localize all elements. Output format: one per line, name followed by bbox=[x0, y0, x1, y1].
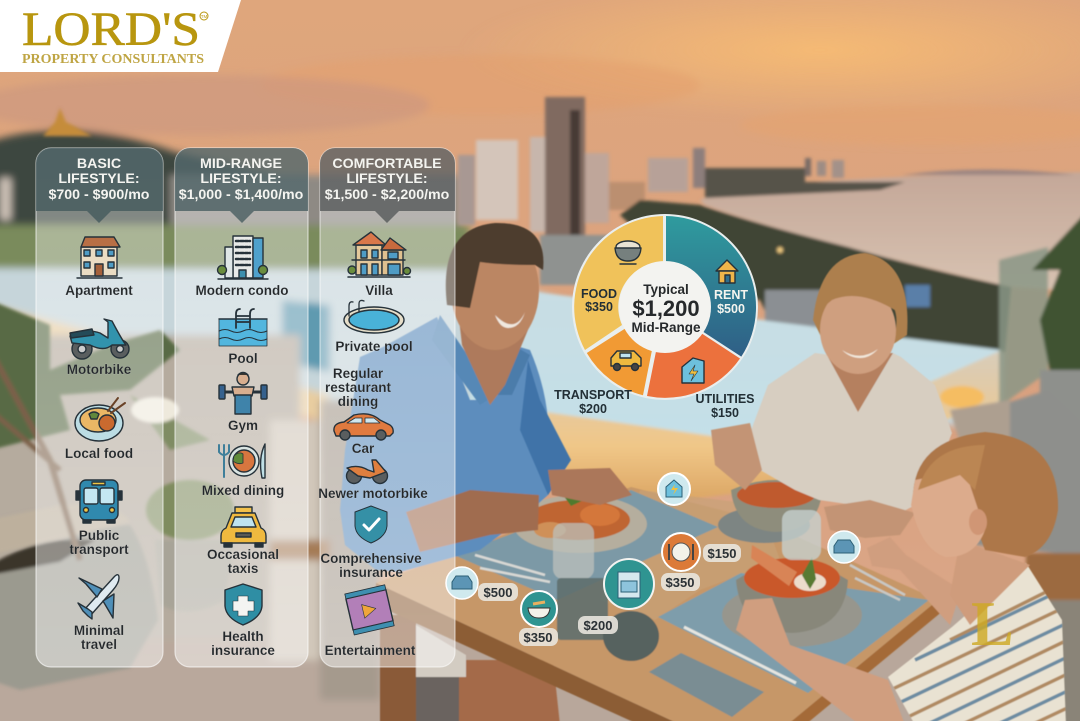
watermark monogram: L bbox=[971, 588, 1014, 659]
segment: food bbox=[574, 216, 663, 350]
label: modern condo: Modern condo bbox=[196, 283, 288, 298]
label: health insurance: Health bbox=[222, 629, 264, 644]
price pill: $150 bbox=[703, 544, 741, 562]
heading: comfortable lifestyle price: COMFORTABLE bbox=[332, 156, 442, 172]
label: food: $350 bbox=[585, 300, 613, 314]
icon: pool bbox=[219, 309, 267, 346]
centre text bbox=[632, 282, 701, 335]
label: gym: Gym bbox=[228, 418, 258, 433]
woman's bowl bbox=[718, 507, 810, 543]
label: rent: $500 bbox=[717, 302, 745, 316]
heading: basic lifestyle price: BASIC bbox=[77, 156, 121, 172]
icon: newer motorbike bbox=[346, 460, 388, 484]
heading: mid-range lifestyle price: MID-RANGE bbox=[200, 156, 282, 172]
label: local food: Local food bbox=[65, 446, 133, 461]
icon: power house bbox=[682, 358, 704, 383]
sea, far coast and city bbox=[700, 172, 1080, 292]
price pill: $500 bbox=[478, 583, 518, 601]
trademark mark: TM bbox=[201, 14, 207, 19]
icon: comprehensive insurance shield bbox=[355, 506, 387, 543]
centre circle bbox=[619, 261, 711, 353]
panel: comfortable lifestyle bbox=[318, 148, 455, 667]
icon: airplane bbox=[78, 575, 119, 619]
icon: house bbox=[716, 260, 738, 283]
price pill: $350 bowl: $350 bbox=[524, 630, 552, 645]
segment: transport bbox=[587, 329, 652, 395]
chair, legs, leg of table bbox=[416, 675, 461, 721]
heading: comfortable lifestyle price: $1,500 - $2,200/mo bbox=[325, 187, 450, 203]
label: occasional taxis: taxis bbox=[228, 561, 258, 576]
placemats bbox=[454, 490, 718, 600]
table cost badges bbox=[446, 473, 860, 646]
logo banner bbox=[0, 0, 241, 72]
label: entertainment: Entertainment bbox=[325, 643, 416, 658]
label: regular restaurant dining: Regular bbox=[333, 366, 384, 381]
heading: mid-range lifestyle price: LIFESTYLE: bbox=[200, 171, 282, 187]
panel header: basic bbox=[36, 148, 163, 223]
icon: entertainment film bbox=[345, 585, 394, 635]
label: car: Car bbox=[352, 441, 375, 456]
label: minimal travel: Minimal bbox=[74, 623, 124, 638]
heading: comfortable lifestyle price: LIFESTYLE: bbox=[346, 171, 428, 187]
badge: utilities icon bbox=[658, 473, 690, 505]
price pill: $200 bbox=[578, 616, 618, 634]
centre text: $1,200 bbox=[632, 296, 700, 321]
label: public transport: Public bbox=[79, 528, 120, 543]
icon: yellow car bbox=[611, 351, 641, 370]
label: motorbike: Motorbike bbox=[67, 362, 132, 377]
label: pool: Pool bbox=[228, 351, 258, 366]
left foreground pot and plant bbox=[0, 525, 158, 690]
badge: appliance icon bbox=[604, 559, 654, 609]
table wood bbox=[376, 487, 938, 721]
icon: private pool bbox=[344, 300, 404, 333]
price pill: $150: $150 bbox=[708, 546, 736, 561]
badge: car icon left bbox=[446, 567, 478, 599]
label: transport: TRANSPORT bbox=[554, 388, 632, 402]
label: villa: Villa bbox=[365, 283, 393, 298]
heading: mid-range lifestyle price: $1,000 - $1,400/mo bbox=[179, 187, 304, 203]
icon: local food bbox=[75, 398, 125, 441]
badge: dining plate icon bbox=[662, 533, 700, 571]
label: private pool: Private pool bbox=[335, 339, 413, 354]
woman bbox=[750, 353, 952, 512]
icon: villa bbox=[348, 232, 410, 277]
water glasses bbox=[782, 510, 821, 560]
label: newer motorbike: Newer motorbike bbox=[318, 486, 428, 501]
label: comprehensive insurance: insurance bbox=[339, 565, 403, 580]
label: rent: RENT bbox=[714, 288, 748, 302]
label: health insurance: insurance bbox=[211, 643, 275, 658]
panel header: comfortable bbox=[320, 148, 455, 223]
logo wordmark: LORD'S bbox=[22, 3, 200, 56]
man bbox=[340, 317, 571, 572]
pool deck bbox=[470, 290, 1002, 440]
logo strapline: PROPERTY CONSULTANTS bbox=[22, 52, 204, 67]
segment: rent bbox=[666, 216, 756, 357]
label: comprehensive insurance: Comprehensive bbox=[320, 551, 422, 566]
label: regular restaurant dining: restaurant bbox=[325, 380, 392, 395]
icon: car bbox=[334, 414, 393, 440]
panel: basic lifestyle bbox=[36, 148, 163, 667]
jar, can, phone, cutlery bbox=[557, 578, 608, 640]
price pill: $200: $200 bbox=[584, 618, 612, 633]
icon: rice bowl bbox=[615, 241, 641, 264]
pasta plate bbox=[513, 495, 647, 553]
segment: utilities bbox=[647, 333, 740, 398]
label: occasional taxis: Occasional bbox=[207, 547, 279, 562]
boy's bowl bbox=[722, 583, 862, 647]
label: regular restaurant dining: dining bbox=[338, 394, 378, 409]
centre text: Typical bbox=[643, 282, 689, 297]
panel header: mid-range bbox=[175, 148, 308, 223]
icon: gym bbox=[219, 372, 267, 414]
label: apartment: Apartment bbox=[65, 283, 133, 298]
hilltop temple bbox=[43, 108, 92, 136]
centre text: Mid-Range bbox=[632, 320, 701, 335]
glass balustrade and plant bbox=[999, 247, 1048, 407]
heading: mid-range lifestyle price bbox=[179, 156, 304, 203]
trademark mark bbox=[200, 12, 208, 20]
chart: mid-range budget donut bbox=[554, 214, 758, 420]
label: mixed dining: Mixed dining bbox=[202, 483, 284, 498]
heading: basic lifestyle price: $700 - $900/mo bbox=[49, 187, 150, 203]
icon: apartment bbox=[77, 237, 122, 278]
icon: motorbike bbox=[70, 319, 129, 359]
label: utilities: $150 bbox=[711, 406, 739, 420]
icon: health shield bbox=[225, 584, 262, 625]
icon: taxi bbox=[221, 507, 266, 547]
heading: basic lifestyle price: LIFESTYLE: bbox=[58, 171, 140, 187]
icon: mixed dining bbox=[219, 444, 265, 478]
price pill: $350 bowl bbox=[519, 628, 558, 646]
boy bbox=[888, 563, 1066, 721]
icon: modern condo bbox=[218, 236, 268, 279]
icon: public transport bus bbox=[76, 480, 122, 523]
badge: car icon right bbox=[828, 531, 860, 563]
label: public transport: transport bbox=[69, 542, 129, 557]
badge: bowl icon bbox=[521, 591, 557, 627]
label: utilities: UTILITIES bbox=[695, 392, 755, 406]
label: minimal travel: travel bbox=[81, 637, 117, 652]
price pill: $500: $500 bbox=[484, 585, 512, 600]
heading: basic lifestyle price bbox=[49, 156, 150, 203]
label: food: FOOD bbox=[581, 287, 617, 301]
price pill: $350 plate bbox=[661, 573, 700, 591]
panel: mid-range lifestyle bbox=[175, 148, 308, 667]
price pill: $350 plate: $350 bbox=[666, 575, 694, 590]
heading: comfortable lifestyle price bbox=[325, 156, 450, 203]
label: transport: $200 bbox=[579, 402, 607, 416]
